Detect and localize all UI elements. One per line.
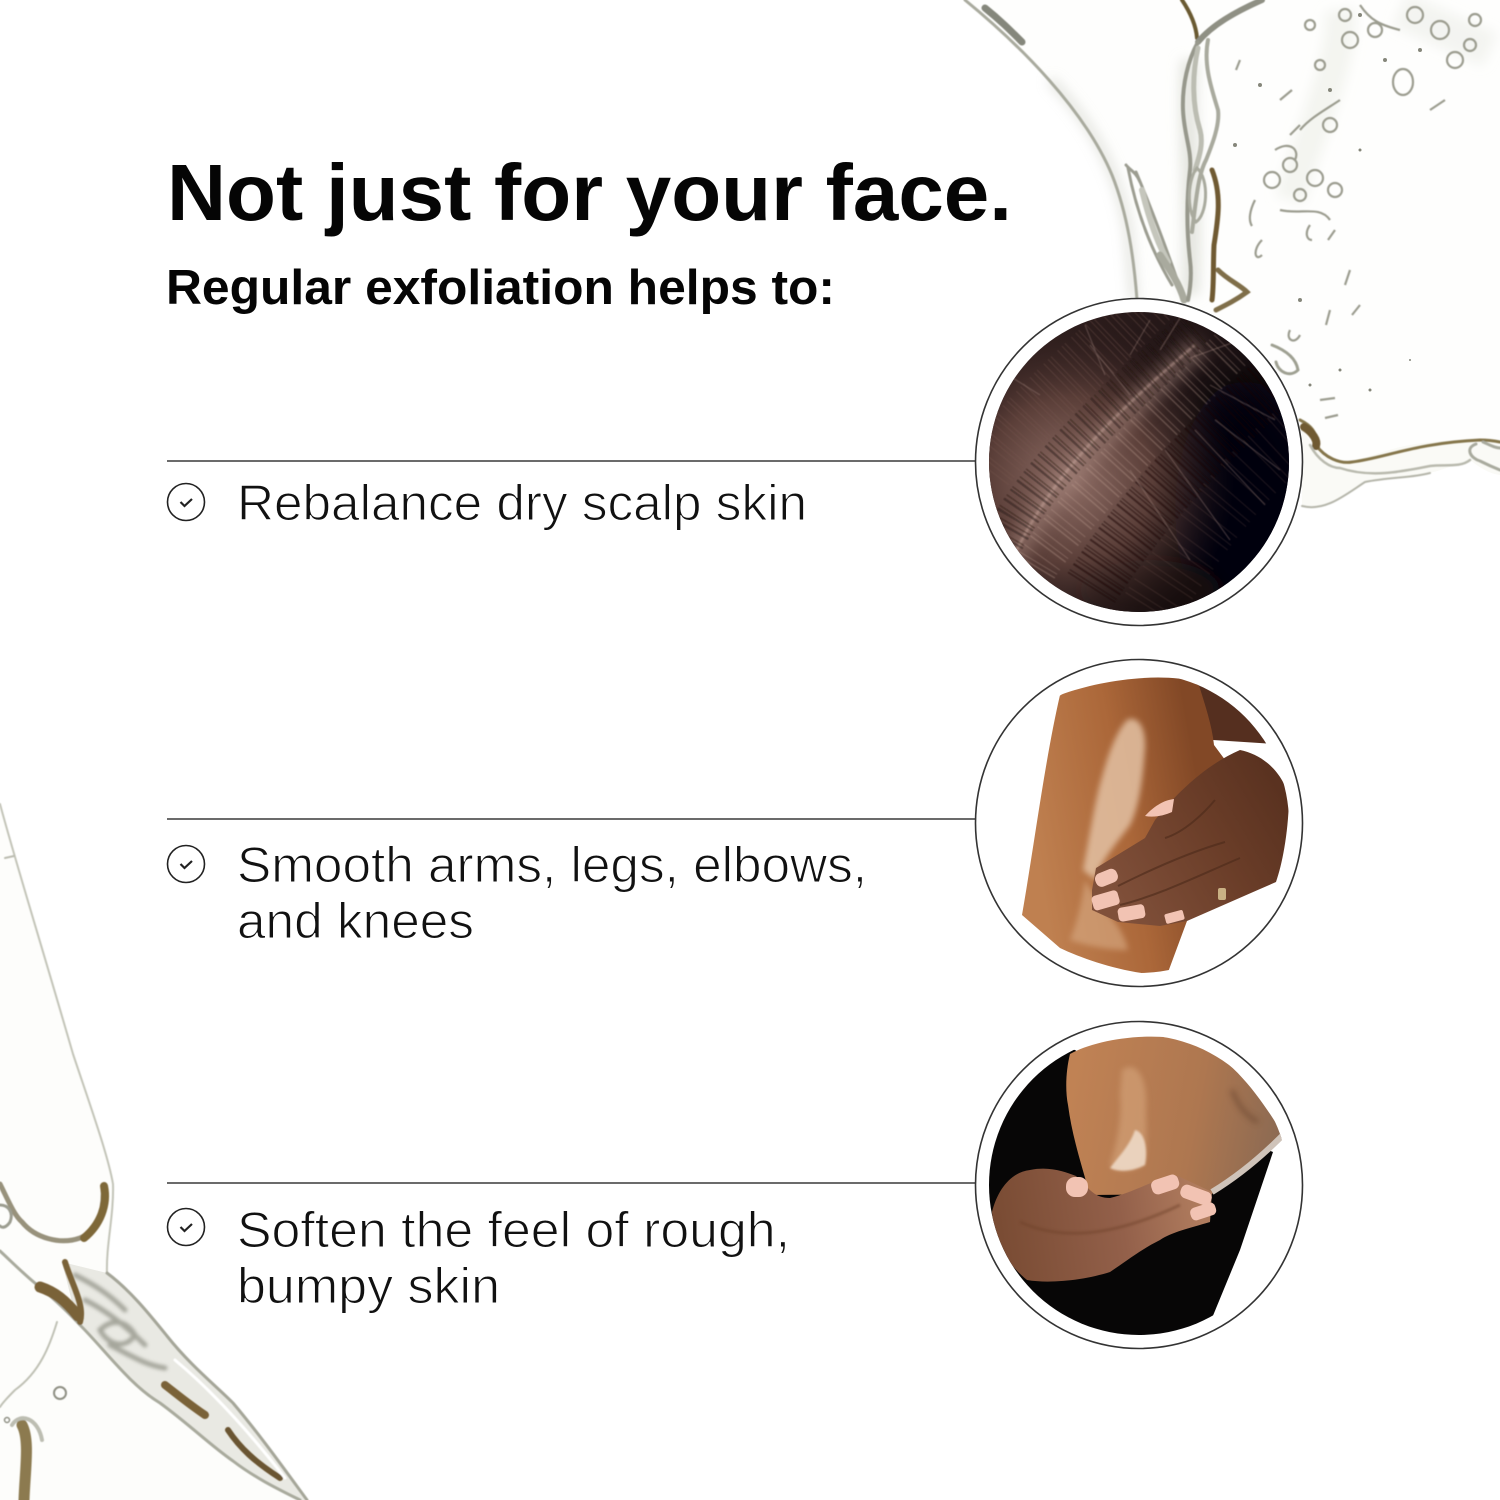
nails bbox=[1066, 1173, 1218, 1222]
icon: check circle bbox=[168, 846, 204, 882]
icon: check circle bbox=[168, 1208, 204, 1246]
photo circle: hand on leg bbox=[976, 660, 1302, 986]
gloss bbox=[1110, 1067, 1146, 1170]
benefit text: and knees bbox=[237, 893, 474, 949]
arm bbox=[1066, 1037, 1284, 1195]
benefit text bbox=[237, 837, 867, 949]
upper arm behind bbox=[1196, 684, 1266, 744]
arm crease bbox=[1232, 1090, 1258, 1122]
nails bbox=[1091, 799, 1185, 924]
benefit text: bumpy skin bbox=[237, 1258, 500, 1314]
arm highlight bbox=[1212, 1136, 1282, 1192]
photo circle: scalp bbox=[975, 298, 1315, 640]
icon: check circle bbox=[168, 484, 204, 520]
stream texture bbox=[75, 1275, 165, 1368]
hand bbox=[992, 1169, 1212, 1282]
liquid splash: top right bbox=[962, 0, 1500, 507]
bubbles and speckles bbox=[1236, 5, 1481, 418]
liquid splash: bottom left bbox=[0, 804, 307, 1500]
gloss bbox=[1070, 719, 1145, 950]
benefit text: Soften the feel of rough, bbox=[237, 1202, 790, 1258]
benefit text: Smooth arms, legs, elbows, bbox=[237, 837, 867, 893]
benefit row: arms and legs bbox=[167, 819, 976, 949]
soft shading in liquid bbox=[1050, 10, 1490, 300]
title: Not just for your face. bbox=[167, 148, 1012, 237]
benefit text bbox=[237, 1202, 790, 1314]
knuckle lines bbox=[1118, 800, 1240, 905]
hand bbox=[1092, 750, 1289, 926]
leg bbox=[1022, 678, 1240, 975]
ring bbox=[1218, 888, 1226, 900]
benefit row: rough skin bbox=[167, 1183, 976, 1314]
benefit row: dry scalp bbox=[167, 461, 976, 531]
stream body bbox=[62, 1262, 307, 1500]
benefit text: Rebalance dry scalp skin bbox=[237, 475, 807, 531]
subtitle: Regular exfoliation helps to: bbox=[166, 261, 835, 315]
photo circle: hand on elbow bbox=[976, 1022, 1302, 1348]
black garment bbox=[985, 1030, 1273, 1340]
